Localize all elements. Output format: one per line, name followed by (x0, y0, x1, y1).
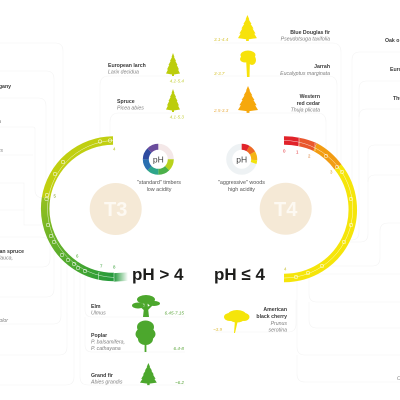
pH donut: standard timbers (146, 147, 171, 172)
connector lines: bottom centre group (80, 76, 185, 385)
tick labels: T4 arc: 3 (330, 170, 333, 174)
species: American black cherry: American (263, 307, 287, 313)
pH donut: aggressive woods (229, 147, 254, 172)
species: American black cherry: Prunus (271, 321, 287, 327)
tick labels: T3 arc: 6 (76, 254, 79, 258)
tick labels: T4 arc (283, 148, 333, 272)
arc centre line (48, 140, 114, 277)
species: American black cherry (213, 307, 287, 334)
species: Jarrah (214, 50, 330, 77)
arc segment pH 0 to 1 (284, 140, 299, 142)
ring: T3 low acidity arc (45, 139, 128, 281)
species: Blue Douglas fir: Pseudotsuga taxifolia (281, 36, 330, 42)
tick labels: T4 arc: 2 (308, 154, 311, 158)
species: Grand fir: ~6.2 (175, 380, 184, 385)
species: European larch (108, 53, 184, 84)
species: American black cherry: ~3.9 (213, 327, 223, 332)
tick labels: T4 arc: 4 (284, 266, 287, 272)
species: Jarrah: Jarrah (314, 64, 330, 70)
species: Grand fir: Grand fir (91, 373, 113, 379)
species: Spruce: Picea abies (117, 106, 144, 112)
species: Elm (91, 295, 184, 317)
connector lines: right group (215, 43, 400, 382)
species: Grand fir: Abies grandis (90, 380, 123, 386)
species: European larch: 4.2-5.4 (170, 78, 184, 84)
species: Elm: Elm (91, 304, 101, 310)
species: Blue Douglas fir: Blue Douglas fir (290, 30, 330, 36)
species: Western red cedar (213, 86, 320, 114)
species: Elm: 6.45-7.15 (165, 310, 184, 316)
arc fade end (114, 272, 128, 282)
tick labels: T4 arc: 1 (296, 150, 299, 154)
tick labels: T3 arc: 7 (100, 264, 103, 268)
caption: standard timbers: low acidity (147, 187, 172, 193)
pH donut: aggressive woods: pH (236, 154, 247, 164)
species: Jarrah: Eucalyptus marginata (280, 71, 330, 77)
heading: pH at or below 4: pH ≤ 4 (214, 265, 265, 284)
arc segment pH 6 to 8 (75, 265, 114, 277)
arc segment pH 2 to 3 (315, 147, 338, 167)
heading: pH above 4: pH > 4 (132, 265, 184, 284)
species: Spruce: Spruce (117, 99, 135, 105)
caption: aggressive woods (218, 180, 265, 193)
species: Spruce: 4.1-5.3 (170, 114, 184, 120)
species: Western red cedar: red cedar (297, 101, 320, 107)
species: Western red cedar: 2.5-3.3 (213, 108, 229, 113)
species: Western red cedar: Western (300, 94, 320, 100)
T4 badge: T4 (274, 199, 298, 221)
species: European larch: European larch (108, 63, 146, 69)
arc segment pH 4 to 5 (46, 140, 113, 198)
caption: aggressive woods: high acidity (228, 187, 255, 193)
species: Grand fir (90, 363, 184, 386)
species: Poplar: 6.4-8 (174, 346, 184, 351)
arc nodes (45, 139, 114, 281)
arc segment pH 1 to 2 (299, 142, 315, 147)
caption: standard timbers: "standard" timbers (137, 180, 181, 186)
arc nodes (294, 138, 353, 279)
connector lines: left group (0, 43, 74, 385)
species: American black cherry: black cherry (256, 314, 287, 320)
species: Poplar: P. balsamifera, (91, 340, 125, 346)
species: Elm: Ulmus (91, 310, 106, 316)
tick labels: T3 arc: 5 (54, 194, 56, 198)
species: Poplar (91, 320, 184, 352)
species: Western red cedar: Thuja plicata (291, 108, 320, 114)
species: Poplar: Poplar (91, 333, 107, 339)
caption: aggressive woods: "aggressive" woods (218, 180, 265, 186)
species: American black cherry: serotina (269, 328, 287, 334)
tick labels: T3 arc: 8 (113, 264, 116, 270)
partial labels: left edge species (0, 84, 24, 324)
species: Blue Douglas fir (214, 15, 330, 42)
arc segment pH 3 to 4 (284, 167, 353, 278)
T4 badge (260, 183, 312, 235)
tick labels: T3 arc: 4 (113, 146, 116, 152)
partial labels: right edge species (385, 38, 400, 382)
partial labels: right edge species: Oak o (385, 38, 399, 44)
species: European larch: Larix decidua (108, 70, 139, 76)
species: Jarrah: 3-3.7 (214, 71, 225, 76)
T3 badge: T3 (104, 199, 127, 221)
tick labels: T4 arc: 0 (283, 148, 286, 154)
pH donut: standard timbers: pH (153, 154, 164, 164)
arc segment pH 5 to 6 (45, 198, 75, 265)
tick labels: T3 arc (54, 146, 116, 270)
T3 badge (90, 183, 142, 235)
species: Blue Douglas fir: 3.1-4.4 (214, 37, 229, 42)
ring: T4 high acidity arc (284, 138, 353, 279)
species: Spruce (117, 89, 184, 120)
arc centre line (284, 140, 353, 278)
caption: standard timbers (137, 180, 181, 193)
species: Poplar: P. cathayana (91, 346, 121, 352)
